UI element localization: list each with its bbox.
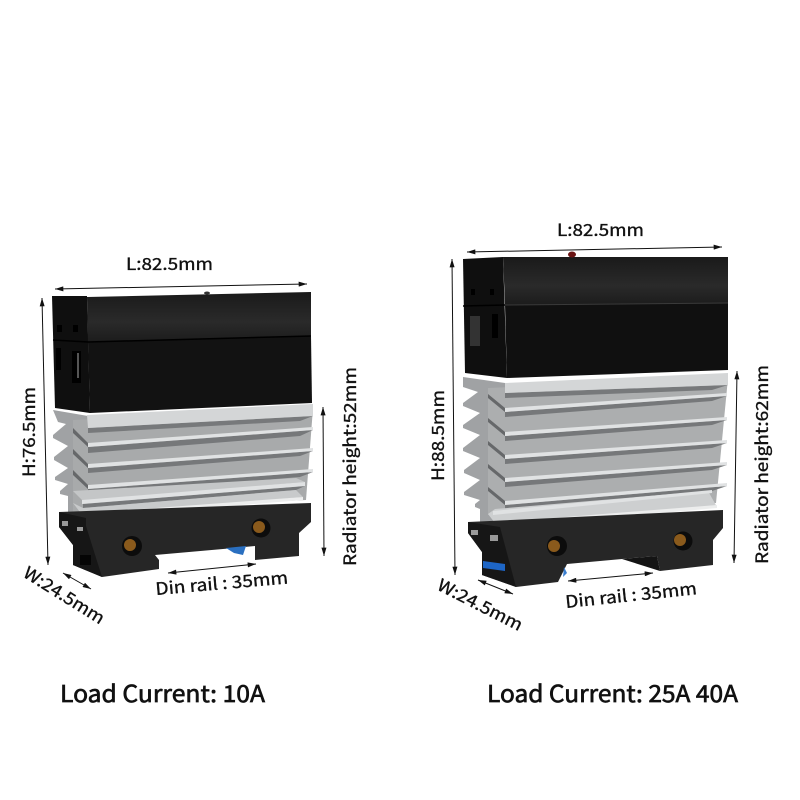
mounting screws bbox=[547, 532, 692, 556]
label: height 10A: H:76.5mm bbox=[15, 387, 40, 477]
label: radiator height 10A: Radiator height:52mm bbox=[336, 367, 361, 566]
din rail base bbox=[468, 510, 723, 587]
heatsink top plate bbox=[505, 373, 728, 393]
label: length 25A 40A: L:82.5mm bbox=[557, 216, 644, 241]
heatsink body bbox=[488, 378, 728, 515]
mounting screws bbox=[122, 518, 270, 556]
heatsink top plate bbox=[87, 404, 313, 428]
heatsink fins bbox=[488, 385, 728, 528]
dimension arrows: 10A bbox=[42, 284, 324, 589]
heatsink body bbox=[73, 408, 313, 512]
indicator LED bbox=[568, 252, 576, 258]
label: din rail 10A: Din rail : 35mm bbox=[154, 563, 289, 600]
label: width 10A: W:24.5mm bbox=[19, 559, 111, 629]
product: 10A relay bbox=[52, 292, 313, 577]
label: width 25A 40A: W:24.5mm bbox=[434, 571, 528, 636]
dimension arrows: 25A 40A bbox=[452, 247, 737, 594]
heatsink spine and left spikes bbox=[53, 410, 90, 522]
heatsink spine and left spikes bbox=[463, 377, 505, 528]
housing: black case bbox=[52, 292, 312, 413]
label: radiator height 25A 40A: Radiator height:62mm bbox=[748, 365, 773, 564]
label: din rail 25A 40A: Din rail : 35mm bbox=[564, 574, 698, 613]
caption: load current 10A: Load Current: 10A bbox=[60, 675, 265, 709]
product: 25A 40A relay bbox=[463, 252, 728, 587]
din rail base bbox=[59, 503, 311, 577]
housing: black case bbox=[463, 257, 728, 378]
label: height 25A 40A: H:88.5mm bbox=[424, 390, 449, 481]
heatsink fins bbox=[73, 416, 313, 518]
caption: load current 25A 40A: Load Current: 25A 40A bbox=[487, 675, 738, 709]
label: length 10A: L:82.5mm bbox=[126, 250, 213, 275]
